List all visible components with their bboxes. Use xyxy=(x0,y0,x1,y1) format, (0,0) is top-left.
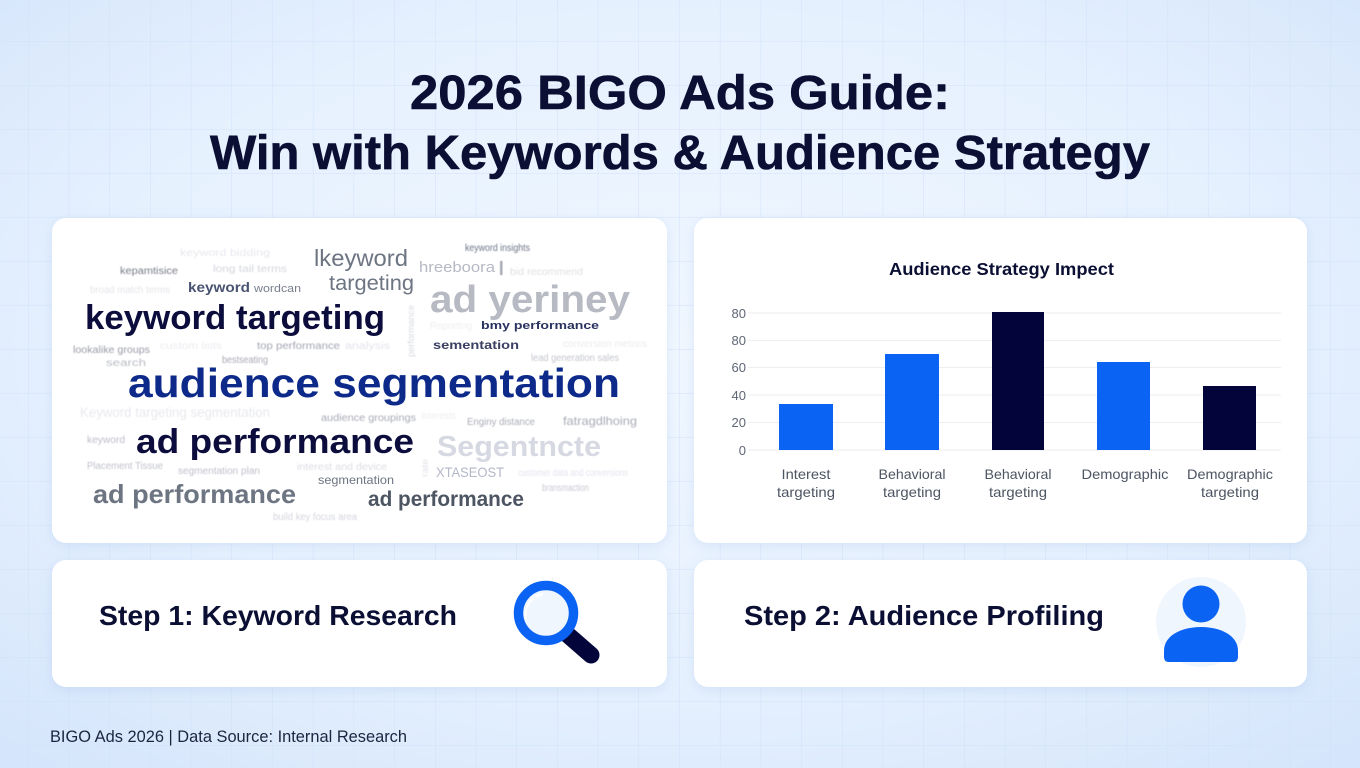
vertical words xyxy=(406,305,430,477)
title: 2026 BIGO Ads Guide: xyxy=(410,67,950,120)
faint small words: bransmaction xyxy=(542,483,589,494)
vertical words: rate xyxy=(420,459,430,477)
main keywords: XTASEOST xyxy=(436,464,504,480)
main keywords: wordcan xyxy=(253,283,301,295)
y axis labels: 40 xyxy=(732,388,746,403)
main keywords xyxy=(85,245,630,511)
faint small words: custom lists xyxy=(160,341,222,352)
faint small words: bestseating xyxy=(222,355,268,366)
y axis labels xyxy=(732,306,746,458)
title xyxy=(210,67,1150,180)
y axis labels: 20 xyxy=(732,415,746,430)
faint small words: Placement Tissue xyxy=(87,461,163,472)
faint small words: conversion metrics xyxy=(563,339,647,350)
faint small words: long tail terms xyxy=(213,264,287,275)
faint small words: Keyword targeting segmentation xyxy=(80,404,270,420)
faint small words: Enginy distance xyxy=(467,417,535,428)
main keywords: ad performance xyxy=(136,423,414,461)
x axis labels: Behavioral xyxy=(984,466,1052,482)
faint small words: segmentation plan xyxy=(178,466,260,477)
bars xyxy=(779,312,1256,450)
vertical words: performance xyxy=(406,305,416,357)
faint small words: Interests xyxy=(421,411,456,422)
faint small words: audience groupings xyxy=(321,413,416,424)
main keywords: sementation xyxy=(433,338,519,352)
panel: keyword word cloud xyxy=(52,218,667,543)
x axis labels: targeting xyxy=(1201,484,1259,500)
faint small words xyxy=(73,243,647,523)
main keywords: targeting xyxy=(329,272,414,295)
main keywords: keyword targeting xyxy=(85,299,385,337)
y axis labels: 60 xyxy=(732,360,746,375)
icon: person xyxy=(1156,577,1246,667)
faint small words: search xyxy=(106,358,146,369)
main keywords: Segentncte xyxy=(437,431,601,463)
main keywords: segmentation xyxy=(318,473,394,487)
faint small words: build key focus area xyxy=(273,512,357,523)
x axis labels: targeting xyxy=(777,484,835,500)
y axis labels: 0 xyxy=(739,443,746,458)
main keywords: hreeboora xyxy=(419,259,496,276)
main keywords: lkeyword xyxy=(314,245,408,271)
main keywords: ad performance xyxy=(368,488,524,511)
faint small words: broad match terms xyxy=(90,285,170,296)
faint small words: fatragdlhoing xyxy=(563,414,637,428)
chart title: Audience Strategy Impect xyxy=(889,259,1114,279)
faint small words: top performance xyxy=(257,341,340,352)
faint small words: lookalike groups xyxy=(73,345,150,356)
icon: magnifying glass xyxy=(518,586,591,655)
main keywords: audience segmentation xyxy=(128,360,620,406)
faint small words: kepamtisice xyxy=(120,266,178,277)
main keywords: keyword xyxy=(188,279,250,295)
panel: step 2 xyxy=(694,560,1307,687)
faint small words: Reporting xyxy=(430,321,472,332)
faint small words: interest and device xyxy=(297,462,387,473)
x axis labels: Interest xyxy=(782,466,831,482)
y axis labels: 80 xyxy=(732,333,746,348)
faint small words: keyword xyxy=(87,435,125,446)
faint small words: bid recommend xyxy=(510,267,583,278)
x axis labels: Demographic xyxy=(1082,466,1168,482)
step 2 heading: Step 2: Audience Profiling xyxy=(744,600,1104,631)
y axis labels: 80 xyxy=(732,306,746,321)
grid lines xyxy=(748,313,1281,450)
panel: step 1 xyxy=(52,560,667,687)
faint small words: customer data and conversions xyxy=(518,468,628,479)
main keywords: bmy performance xyxy=(481,320,599,332)
footer source line: BIGO Ads 2026 | Data Source: Internal Research xyxy=(50,728,407,746)
title: Win with Keywords & Audience Strategy xyxy=(210,127,1150,180)
x axis labels: targeting xyxy=(989,484,1047,500)
x axis labels: Behavioral xyxy=(878,466,946,482)
x axis labels xyxy=(777,466,1273,500)
panel: audience strategy bar chart xyxy=(694,218,1307,543)
main keywords: ad performance xyxy=(93,479,296,509)
main keywords: ad yeriney xyxy=(430,279,630,321)
x axis labels: Demographic xyxy=(1187,466,1273,482)
faint small words: analysis xyxy=(345,341,390,352)
step 1 heading: Step 1: Keyword Research xyxy=(99,600,457,631)
faint small words: lead generation sales xyxy=(531,353,619,364)
x axis labels: targeting xyxy=(883,484,941,500)
faint small words: keyword bidding xyxy=(180,248,270,259)
faint small words: keyword insights xyxy=(465,243,530,254)
